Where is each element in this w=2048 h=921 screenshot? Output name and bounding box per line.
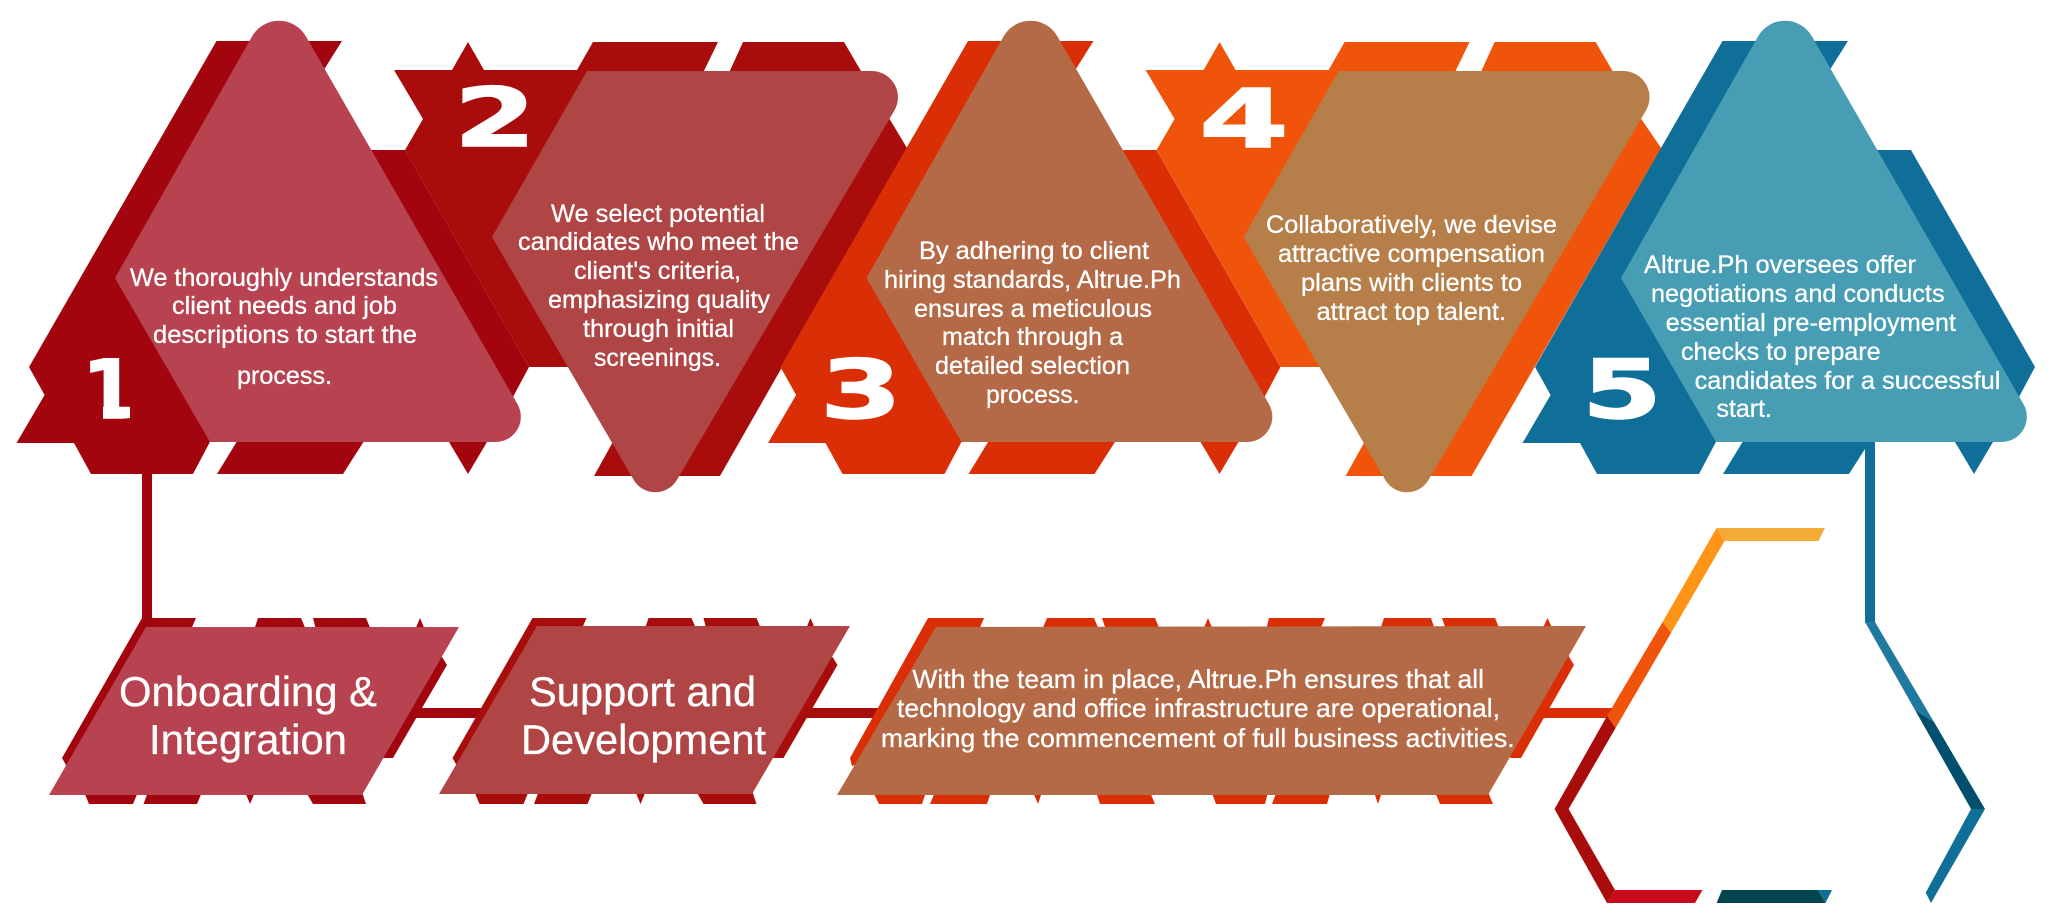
step 1 description [130, 264, 438, 390]
step 5 description: checks to prepare [1681, 338, 1881, 366]
step 2 description: candidates who meet the [518, 228, 799, 256]
step 1 light panel [115, 21, 521, 442]
launch description: With the team in place, Altrue.Ph ensures that all [912, 664, 1484, 694]
launch description: marking the commencement of full business activities. [881, 723, 1515, 753]
support light panel [439, 626, 850, 794]
step 2 description: client's criteria, [574, 257, 741, 285]
onboarding heading [119, 668, 377, 763]
hexagon lower left red stroke [1554, 716, 1616, 903]
step 1 dark star shape [16, 41, 529, 474]
step 3 light panel [866, 21, 1272, 442]
step 4 description [1266, 211, 1557, 326]
step 5 description: start. [1716, 395, 1772, 423]
step 3 description: By adhering to client [919, 237, 1149, 265]
hexagon bottom teal cap [1717, 890, 1826, 903]
step 2 description: screenings. [594, 344, 721, 372]
step 5 description: negotiations and conducts [1651, 280, 1945, 308]
launch dark backing [850, 618, 1574, 804]
step 4 light panel [1244, 71, 1650, 492]
step 5 description: Altrue.Ph oversees offer [1644, 251, 1916, 279]
step 5 description: essential pre-employment [1666, 309, 1956, 337]
connector from step 1 to onboarding [142, 470, 152, 622]
onboarding heading: Integration [149, 716, 347, 763]
panel: operational launch [837, 618, 1586, 804]
step 2 light panel [492, 71, 898, 492]
hexagon middle left orange stroke [1607, 622, 1671, 728]
step 3 description: hiring standards, Altrue.Ph [884, 266, 1181, 294]
step 4 description: plans with clients to [1301, 269, 1522, 297]
step 5 number: 5 [1582, 344, 1662, 438]
hexagon upper left orange stroke [1663, 528, 1724, 633]
step 3 description: ensures a meticulous [914, 295, 1152, 323]
hexagon outline [1554, 528, 1985, 903]
step 2: select candidates [394, 42, 907, 492]
hexagon bottom cap blue end [1818, 890, 1832, 903]
step 3 description: match through a [942, 323, 1123, 351]
step 2 description: emphasizing quality [548, 286, 770, 314]
step 5 description: candidates for a successful [1695, 367, 2000, 395]
step 1 description: client needs and job [172, 292, 397, 320]
support heading: Support and [529, 668, 756, 715]
step 1 description: descriptions to start the [153, 321, 417, 349]
step 2 description: through initial [583, 315, 734, 343]
connector onboarding to support [405, 708, 490, 718]
hexagon middle right teal stroke [1915, 710, 1985, 809]
hexagon upper right blue stroke [1865, 622, 1934, 722]
hexagon top cap [1717, 528, 1825, 541]
step 3 description: detailed selection [935, 352, 1130, 380]
panel: onboarding and integration [49, 618, 459, 804]
launch light panel [837, 626, 1586, 795]
connector launch to hexagon [1530, 708, 1615, 718]
step 2 description [518, 200, 799, 372]
step 3 description [884, 237, 1181, 409]
step 5 light panel [1621, 21, 2027, 442]
step 3 dark star shape [768, 41, 1280, 474]
step 4 description: attract top talent. [1316, 298, 1506, 326]
support heading [521, 668, 766, 763]
step 3: detailed selection [768, 21, 1280, 474]
support dark backing [452, 618, 838, 804]
step 1 number: 1 [82, 344, 137, 438]
step 4 description: attractive compensation [1278, 240, 1545, 268]
step 5 description [1644, 251, 2000, 423]
step 5: offer and pre-employment checks [1522, 21, 2035, 623]
hexagon lower right blue stroke [1926, 809, 1985, 903]
onboarding heading: Onboarding & [119, 668, 377, 715]
step 1 description: We thoroughly understands [130, 264, 438, 292]
onboarding dark backing [62, 618, 447, 804]
step 5 dark star shape [1522, 41, 2035, 474]
step 2 dark star shape [394, 42, 907, 476]
hexagon bottom red cap [1607, 890, 1702, 903]
step 4 dark star shape [1146, 42, 1661, 476]
step 2 description: We select potential [551, 200, 765, 228]
step 1: understand client needs [16, 21, 529, 474]
panel: support and development [439, 618, 850, 804]
launch description: technology and office infrastructure are operational, [897, 693, 1500, 723]
step 2 number: 2 [454, 72, 536, 166]
step 3 description: process. [986, 381, 1080, 409]
step 4 description: Collaboratively, we devise [1266, 211, 1557, 239]
launch description [881, 664, 1515, 753]
support heading: Development [521, 716, 766, 763]
onboarding light panel [49, 627, 459, 795]
step 1 description: process. [237, 362, 332, 390]
step 4 number: 4 [1199, 73, 1289, 167]
connector support to launch [795, 708, 890, 718]
step 4: compensation plans [1146, 42, 1661, 492]
step 3 number: 3 [820, 344, 902, 438]
connector from step 5 down to hexagon [1865, 430, 1875, 623]
